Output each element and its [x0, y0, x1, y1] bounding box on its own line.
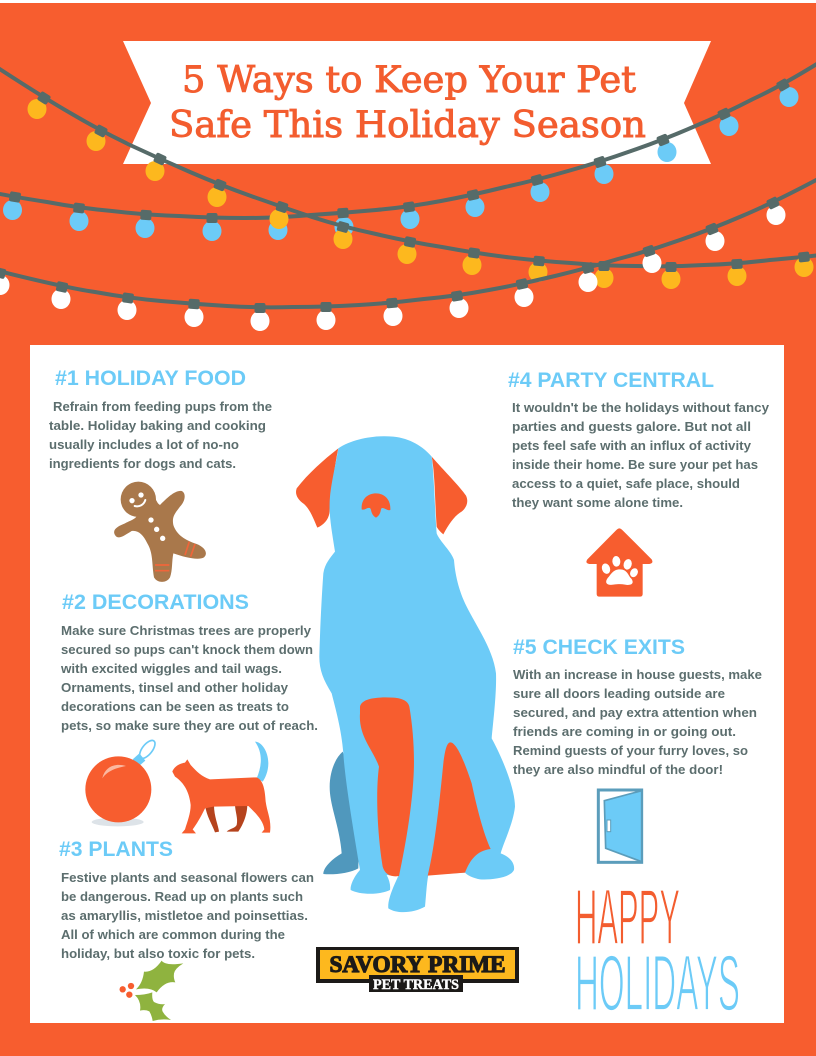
heading #1: #1 HOLIDAY FOOD — [55, 367, 246, 390]
text: check exits: sure all doors leading outside are — [513, 686, 725, 701]
text: party central: It wouldn't be the holidays without fancy — [512, 400, 770, 415]
heading #5: #5 CHECK EXITS — [513, 636, 685, 659]
dog chest patch — [360, 697, 414, 876]
icon: gingerbread man — [114, 482, 206, 582]
text: holiday food — [49, 399, 272, 471]
icon: cat — [172, 742, 270, 833]
text: check exits — [513, 667, 762, 777]
text: holiday food: ingredients for dogs and cats. — [49, 456, 236, 471]
string lights: yellow — [0, 66, 816, 289]
text: decorations: secured so pups can't knock them down — [61, 642, 313, 657]
icon: house with paw — [586, 528, 652, 597]
text: party central: pets feel safe with an influx of activity — [512, 438, 752, 453]
text: plants: be dangerous. Read up on plants such — [61, 889, 303, 904]
text: holiday food: usually includes a lot of no-no — [49, 437, 239, 452]
text: check exits: friends are coming in or going out. — [513, 724, 736, 739]
dog nose — [362, 493, 390, 518]
text: plants: All of which are common during the — [61, 927, 285, 942]
text: holiday food: Refrain from feeding pups from the — [53, 399, 272, 414]
text: plants: Festive plants and seasonal flowers can — [61, 870, 314, 885]
text: check exits: Remind guests of your furry loves, so — [513, 743, 748, 758]
text: party central: parties and guests galore. But not all — [512, 419, 751, 434]
dog back leg — [323, 752, 360, 874]
logo: Savory Prime Pet Treats: SAVORY PRIME — [330, 952, 506, 977]
title — [169, 60, 646, 146]
string lights: blue — [0, 62, 816, 241]
text: party central — [512, 400, 770, 510]
text: party central: they want some alone time. — [512, 495, 683, 510]
heading #2: #2 DECORATIONS — [62, 591, 249, 614]
dog right ear — [432, 457, 467, 534]
title: Safe This Holiday Season — [169, 105, 646, 146]
text: decorations — [60, 623, 318, 733]
heading #3: #3 PLANTS — [59, 838, 173, 861]
white content panel — [30, 345, 784, 1023]
dog illustration — [296, 436, 515, 912]
text: party central: access to a quiet, safe place, should — [512, 476, 740, 491]
cat far legs — [205, 804, 247, 832]
text: decorations: Ornaments, tinsel and other holiday — [61, 680, 289, 695]
dog haunch patch — [428, 742, 491, 876]
text: plants — [61, 870, 314, 961]
text: decorations: decorations can be seen as treats to — [61, 699, 289, 714]
text: plants: holiday, but also toxic for pets. — [61, 946, 255, 961]
logo: Savory Prime Pet Treats: PET TREATS — [373, 977, 459, 993]
title banner — [123, 41, 711, 164]
icon: holly — [119, 961, 183, 1021]
heading #4: #4 PARTY CENTRAL — [508, 369, 714, 392]
logo: Savory Prime Pet Treats — [316, 947, 519, 993]
text: decorations: pets, so make sure they are out of reach. — [61, 718, 318, 733]
text: check exits: With an increase in house guests, make — [513, 667, 762, 682]
text: decorations: Make sure Christmas trees are properly — [61, 623, 312, 638]
icon: ornament — [85, 738, 158, 826]
text: party central: inside their home. Be sure your pet has — [512, 457, 758, 472]
text: decorations: with excited wiggles and tail wags. — [60, 661, 282, 676]
title: 5 Ways to Keep Your Pet — [182, 60, 637, 101]
text: plants: as amaryllis, mistletoe and poinsettias. — [61, 908, 308, 923]
happy holidays lettering — [575, 872, 740, 1027]
text: check exits: they are also mindful of the door! — [513, 762, 723, 777]
cat body — [172, 759, 270, 833]
icon: open door — [598, 790, 642, 862]
text: check exits: secured, and pay extra attention when — [513, 705, 757, 720]
dog left ear — [296, 448, 338, 528]
cat tail — [255, 742, 268, 782]
dog body — [319, 436, 515, 912]
text: holiday food: table. Holiday baking and cooking — [49, 418, 266, 433]
string lights: white — [0, 178, 816, 331]
